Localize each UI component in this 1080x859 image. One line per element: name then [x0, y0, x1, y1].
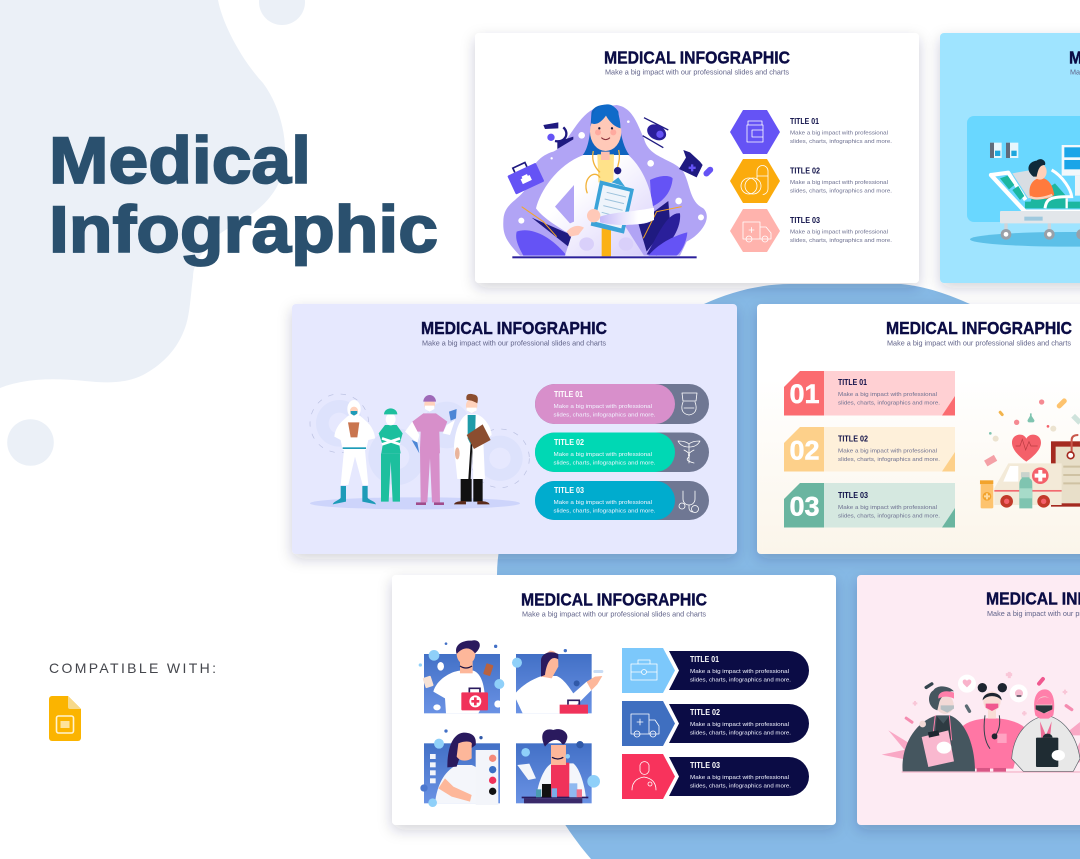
icon: caduceus: [678, 441, 700, 463]
illustration: three carers: [882, 673, 1080, 773]
icon: google slides: [49, 696, 81, 741]
main title: Infographic: [49, 192, 438, 266]
panel: pink card with three carers: [857, 575, 1080, 825]
illustration: four medical staff: [310, 394, 529, 509]
panel: cyan card with hospital bed: [940, 33, 1080, 283]
label: 03: [784, 483, 955, 528]
panel: white card with doctor: [475, 33, 919, 283]
row: title 03 arrow and band: [622, 754, 809, 799]
pill: title 01: [535, 384, 709, 424]
icon: ambulance: [622, 701, 675, 746]
illustration: doctor with clipboard: [503, 104, 714, 258]
row: title 02 arrow and band: TITLE 02: [690, 708, 720, 717]
row: title 01 arrow and band: Make a big impact with professional: [690, 669, 789, 675]
row: title 02 with orange hexagon: TITLE 02: [790, 166, 820, 176]
card 6 background: [857, 575, 1080, 825]
row: title 02 arrow and band: [622, 701, 809, 746]
card 1 background: [475, 33, 919, 283]
label: 01: 01: [789, 379, 820, 409]
label: 03: 03: [789, 492, 820, 522]
main title: [49, 123, 438, 266]
label: 03: slides, charts, infographics and more.: [838, 513, 940, 519]
pill: title 01: slides, charts, infographics and more.: [554, 412, 656, 418]
row: title 03 with pink hexagon: [730, 209, 892, 252]
decorative circle: left: [7, 419, 54, 466]
main title: Medical: [49, 123, 311, 197]
panel: white card with clinicians: [392, 575, 836, 825]
label: 03: Make a big impact with professional: [838, 505, 937, 511]
card 3 heading: MEDICAL INFOGRAPHIC: [421, 318, 607, 338]
row: title 03 with pink hexagon: TITLE 03: [790, 216, 820, 225]
label: 01: Make a big impact with professional: [838, 392, 937, 398]
card 3 subheading: Make a big impact with our professional slides and charts: [422, 340, 607, 348]
row: title 02 with orange hexagon: Make a big impact with professional: [790, 180, 888, 186]
pill: title 02: TITLE 02: [554, 438, 584, 447]
row: title 01 with purple hexagon: TITLE 01: [790, 117, 819, 126]
pill: title 03: [535, 481, 709, 520]
label: 02: slides, charts, infographics and more.: [838, 457, 940, 463]
row: title 02 with orange hexagon: slides, charts, infographics and more.: [790, 188, 892, 194]
card 2 background: [940, 33, 1080, 283]
card 1 subheading: Make a big impact with our professional slides and charts: [605, 70, 790, 76]
row: title 03 arrow and band: slides, charts, infographics and more.: [690, 783, 791, 789]
icon: first aid case: [622, 648, 675, 693]
row: title 03 with pink hexagon: Make a big impact with professional: [790, 230, 888, 236]
icon: nurse: [622, 754, 675, 799]
card 4 background: [757, 304, 1080, 554]
panel: cream card with numbered labels: [757, 304, 1080, 554]
background blob: pale top-left: [0, 0, 285, 388]
label: 03: TITLE 03: [838, 491, 868, 500]
label: 01: [784, 371, 955, 416]
icon: pills hexagon: [730, 159, 780, 203]
icon: medicine jar hexagon: [730, 110, 780, 154]
row: title 01 with purple hexagon: [730, 110, 892, 154]
illustration: patient in hospital bed: [970, 143, 1080, 247]
label: 01: TITLE 01: [838, 378, 867, 387]
pill: title 02: [535, 432, 709, 472]
decorative circle: top: [259, 0, 305, 25]
card 4 subheading: Make a big impact with our professional slides and charts: [887, 340, 1072, 348]
row: title 03 arrow and band: TITLE 03: [690, 761, 720, 770]
pill: title 03: slides, charts, infographics and more.: [554, 508, 656, 514]
row: title 02 with orange hexagon: [730, 159, 892, 203]
row: title 01 with purple hexagon: slides, charts, infographics and more.: [790, 139, 892, 145]
panel: lavender card with medical staff: [292, 304, 737, 554]
card 5 background: [392, 575, 836, 825]
inner blue panel: [967, 116, 1080, 222]
row: title 02 arrow and band: slides, charts, infographics and more.: [690, 730, 791, 736]
card 1 heading: MEDICAL INFOGRAPHIC: [604, 48, 790, 68]
row: title 03 with pink hexagon: slides, charts, infographics and more.: [790, 238, 892, 244]
illustration: four clinician portraits: [419, 640, 603, 807]
row: title 01 arrow and band: TITLE 01: [690, 655, 719, 664]
row: title 02 arrow and band: Make a big impact with professional: [690, 722, 789, 728]
card 5 subheading: Make a big impact with our professional slides and charts: [522, 612, 707, 618]
compatible with label: COMPATIBLE WITH:: [49, 660, 216, 676]
label: 01: slides, charts, infographics and more.: [838, 400, 940, 406]
row: title 01 arrow and band: slides, charts, infographics and more.: [690, 677, 791, 683]
label: 02: TITLE 02: [838, 434, 868, 444]
pill: title 03: TITLE 03: [554, 486, 584, 495]
card 3 background: [292, 304, 737, 554]
pill: title 02: Make a big impact with professional: [554, 452, 652, 458]
label: 02: 02: [789, 436, 820, 466]
card 5 heading: MEDICAL INFOGRAPHIC: [521, 590, 707, 610]
icon: ambulance hexagon: [730, 209, 780, 252]
label: 02: Make a big impact with professional: [838, 448, 937, 454]
row: title 01 arrow and band: [622, 648, 809, 693]
row: title 03 arrow and band: Make a big impact with professional: [690, 775, 789, 781]
icon: medical mask: [682, 393, 697, 415]
pill: title 01: Make a big impact with professional: [554, 404, 652, 410]
pill: title 01: TITLE 01: [554, 390, 583, 399]
background blob: blue: [496, 284, 1080, 859]
icon: stethoscope: [683, 491, 695, 512]
label: 02: [784, 427, 955, 472]
pill: title 03: Make a big impact with professional: [554, 500, 652, 506]
pill: title 02: slides, charts, infographics and more.: [554, 460, 656, 466]
illustration: ambulance, heart and medicine: [980, 397, 1080, 508]
row: title 01 with purple hexagon: Make a big impact with professional: [790, 130, 888, 136]
